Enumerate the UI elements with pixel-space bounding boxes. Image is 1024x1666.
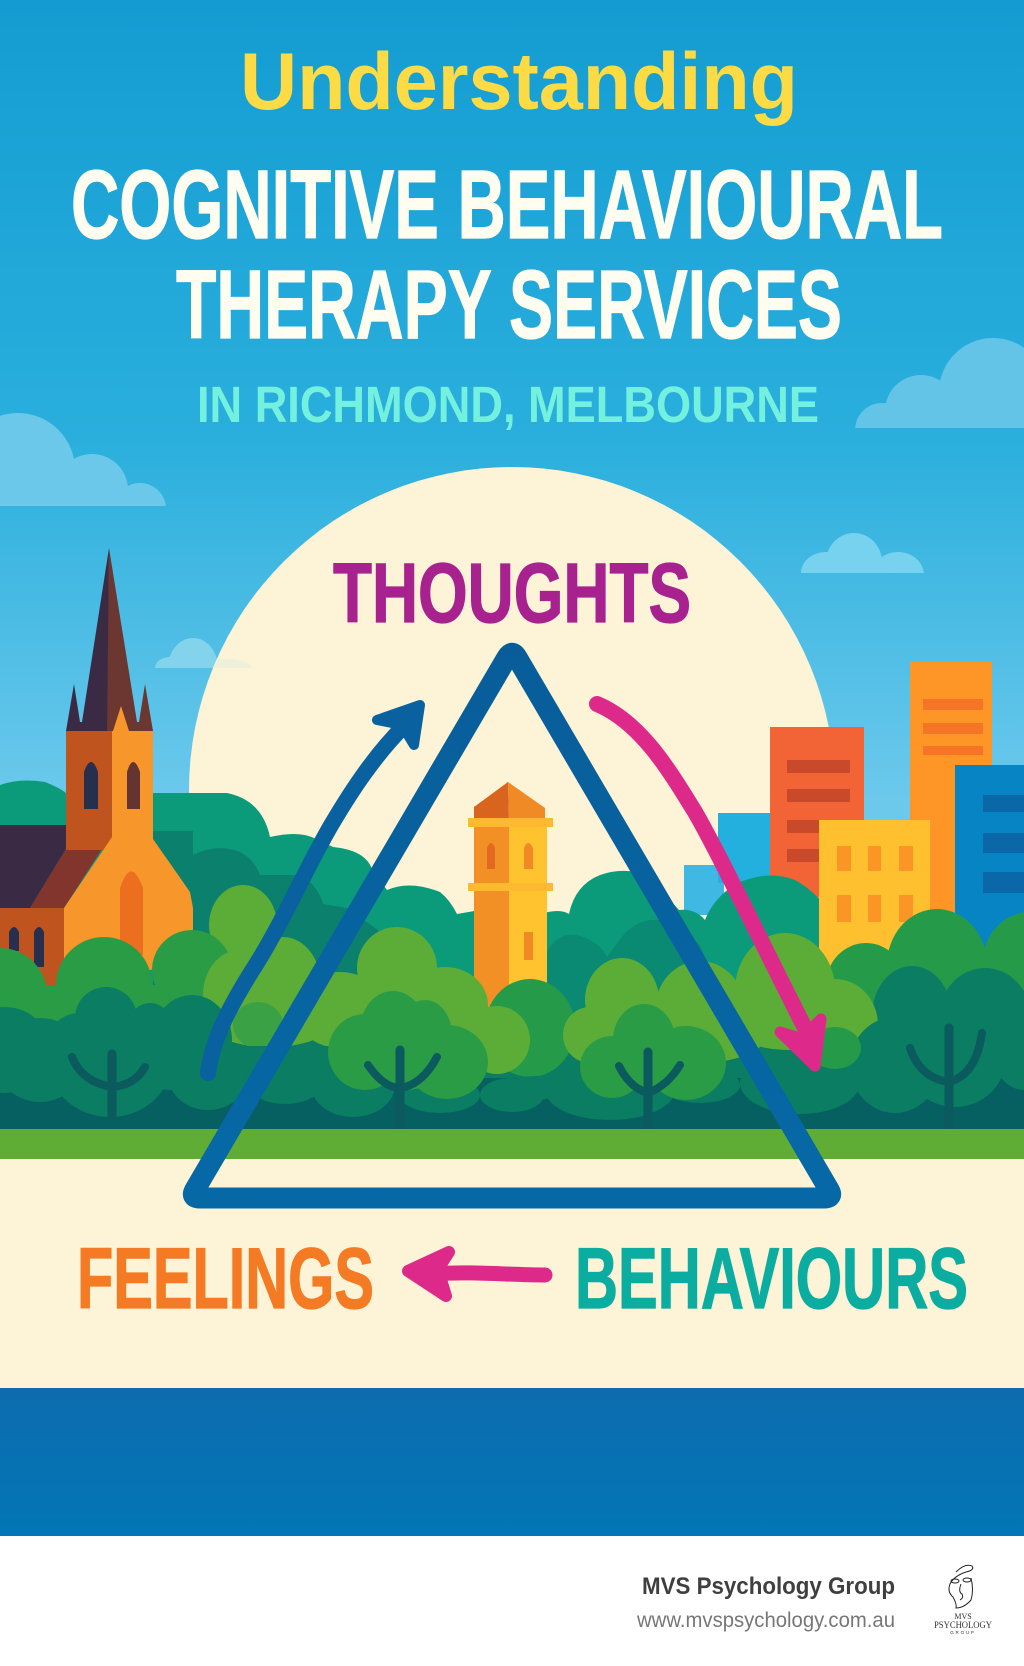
arrow: behaviours to thoughts, blue	[208, 705, 420, 1073]
building: tall orange	[910, 662, 992, 912]
trees: mid green right	[485, 909, 1024, 1077]
trees: back teal left	[0, 781, 480, 1010]
sky background	[0, 0, 1024, 1140]
church	[0, 548, 193, 993]
church nave roof	[0, 825, 66, 908]
building: yellow	[819, 820, 930, 970]
trees: dark teal left	[153, 831, 400, 1010]
footer: website: www.mvspsychology.com.au	[636, 1609, 895, 1632]
church tower	[66, 731, 113, 850]
subtitle: location: IN RICHMOND, MELBOURNE	[197, 376, 819, 433]
cloud: top right	[855, 338, 1024, 428]
cream ground panel	[0, 1159, 1024, 1388]
tree trunks	[72, 1028, 982, 1128]
cloud: left	[0, 413, 166, 506]
logo wordmark: GROUP	[950, 1630, 976, 1635]
trees: dark green right	[872, 966, 1024, 1072]
trees: darkest understory	[0, 1078, 1024, 1130]
logo face line art	[949, 1565, 973, 1608]
church spire	[66, 548, 109, 731]
tree: small mid green by arrow	[809, 1027, 861, 1069]
clock tower	[468, 782, 553, 1043]
title: Understanding: Understanding	[240, 37, 798, 127]
church door	[120, 872, 143, 955]
cloud: small right	[801, 533, 924, 573]
arrow: thoughts to behaviours, pink	[597, 704, 821, 1066]
trees: dark green canopy	[0, 987, 1024, 1120]
trees: dark teal right	[547, 920, 740, 1040]
trees: back teal right	[540, 871, 825, 1040]
building: blue	[955, 765, 1024, 955]
blue band	[0, 1388, 1024, 1536]
building: red orange	[770, 727, 864, 897]
cloud: small behind sun	[155, 638, 217, 668]
sun disc	[189, 467, 835, 1113]
church lower wall	[0, 908, 66, 993]
label: Feelings: FEELINGS	[77, 1231, 374, 1327]
trees: base fill under canopy	[0, 1035, 1024, 1085]
label: Thoughts: THOUGHTS	[333, 546, 691, 640]
building: light blue back	[684, 813, 770, 915]
tree: lime upper left	[209, 885, 277, 965]
arrow: behaviours to feelings, pink	[408, 1252, 545, 1296]
CBT triangle	[193, 653, 831, 1198]
tree: front right bush	[580, 1004, 726, 1100]
trees: lime lower	[203, 927, 878, 1074]
tree: front centre bush	[328, 991, 488, 1099]
footer: organisation name: MVS Psychology Group	[642, 1573, 895, 1600]
tree: mid green patch left	[233, 1002, 283, 1048]
church facade	[64, 837, 193, 990]
logo wordmark: PSYCHOLOGY	[934, 1620, 992, 1630]
logo wordmark	[934, 1612, 992, 1635]
church tower windows	[84, 762, 98, 809]
grass strip	[0, 1129, 1024, 1159]
white footer panel	[0, 1536, 1024, 1666]
trees: mid green left	[0, 930, 232, 1060]
logo wordmark: MVS	[954, 1612, 972, 1621]
cloud tail over sun	[213, 659, 252, 668]
footer: logo	[934, 1565, 992, 1635]
